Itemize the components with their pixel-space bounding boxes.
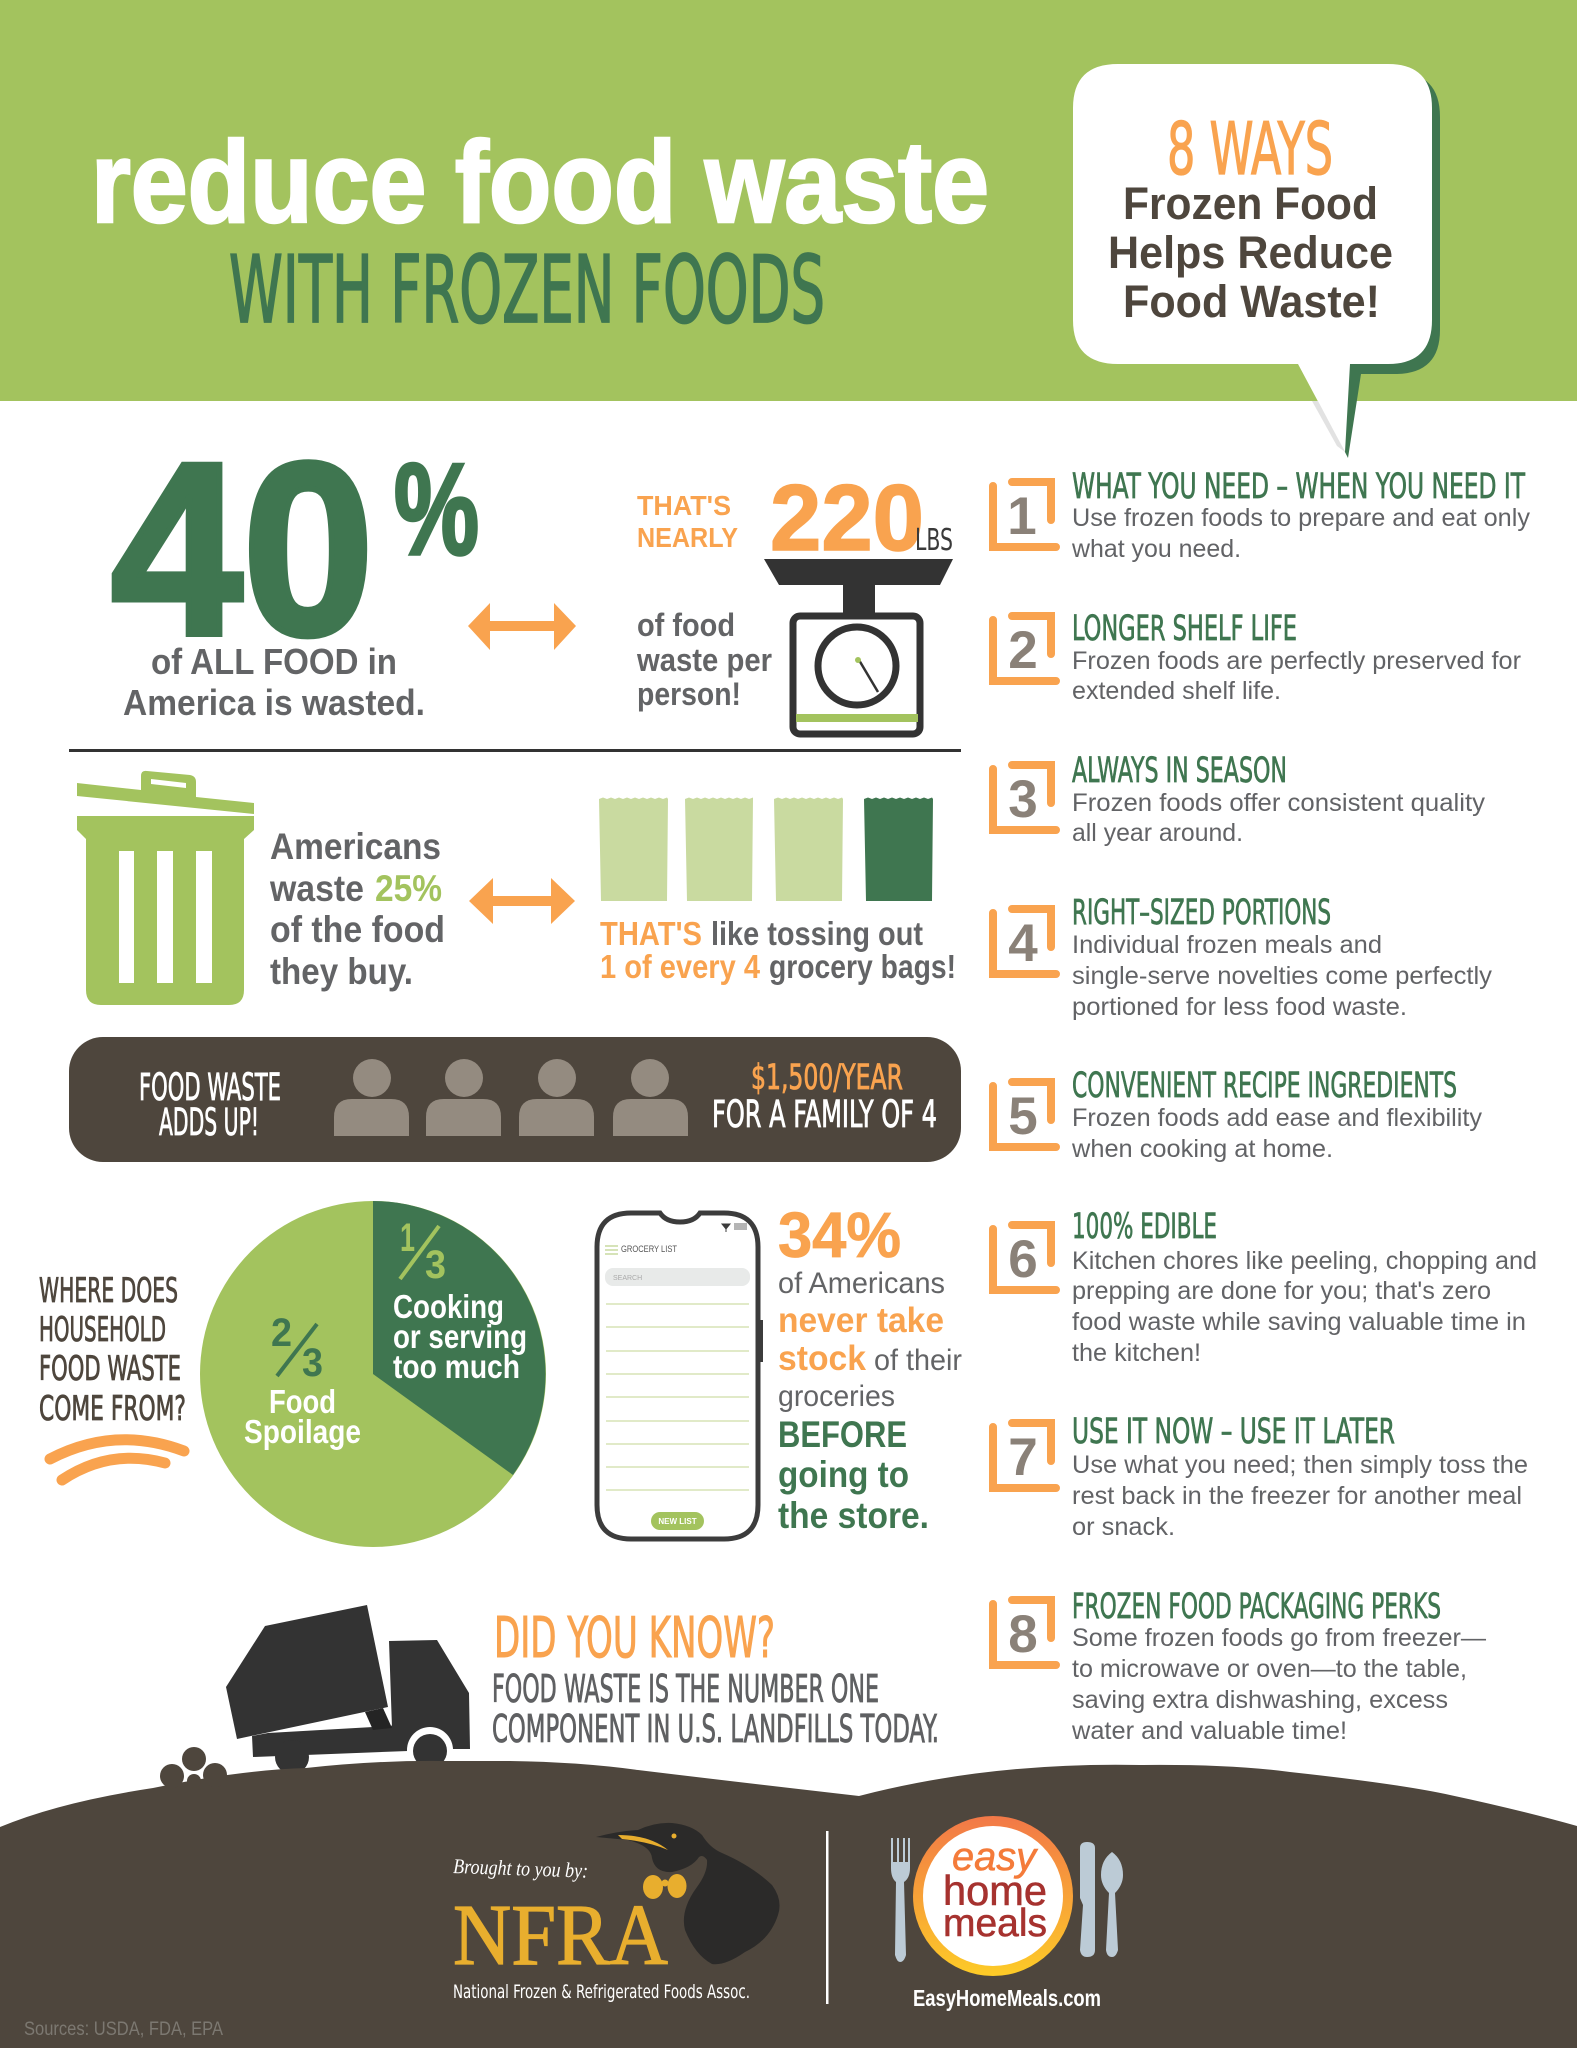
speech bubble: Helps Reduce	[1108, 227, 1393, 278]
list item 6: the kitchen!	[1072, 1339, 1201, 1367]
icon: phone grocery list: GROCERY LIST	[621, 1244, 677, 1254]
text: one of every four bags: like tossing out	[711, 915, 923, 952]
list item 3	[993, 751, 1486, 847]
logo: NFRA	[453, 1823, 780, 2003]
logo: Easy Home Meals	[891, 1816, 1123, 2011]
list item 2: LONGER SHELF LIFE	[1072, 609, 1297, 649]
sources: Sources: USDA, FDA, EPA	[24, 2019, 223, 2040]
list item 1: Use frozen foods to prepare and eat only	[1072, 504, 1530, 532]
list item 4: Individual frozen meals and	[1072, 931, 1382, 959]
arrow: equals 220 lbs	[468, 603, 576, 650]
list item 3: ALWAYS IN SEASON	[1072, 751, 1287, 791]
logo: Easy Home Meals: home	[943, 1867, 1047, 1914]
text: 34 percent of Americans: BEFORE	[778, 1414, 907, 1455]
40 percent statistic	[111, 412, 479, 723]
list item 7	[993, 1412, 1528, 1541]
list item 6: 6	[1008, 1230, 1038, 1289]
40 percent statistic: of ALL FOOD in	[151, 641, 397, 682]
list item 6: 100% EDIBLE	[1072, 1207, 1217, 1247]
list item 5: 5	[1008, 1087, 1038, 1146]
list item 7: or snack.	[1072, 1513, 1175, 1541]
title: reduce food waste	[91, 117, 989, 247]
list item 2	[993, 609, 1521, 705]
list item 8	[993, 1587, 1486, 1745]
text: 34 percent of Americans: never take	[778, 1301, 944, 1340]
pie chart: 2	[271, 1311, 292, 1355]
text: where does household food waste come from	[39, 1271, 186, 1480]
food waste balls	[160, 1747, 227, 1788]
arrow: like tossing out bags	[469, 878, 575, 924]
list item 7: Use what you need; then simply toss the	[1072, 1451, 1528, 1479]
220 lbs statistic: of food	[637, 607, 735, 643]
list item 2: 2	[1008, 621, 1038, 680]
220 lbs statistic: 220	[770, 465, 924, 570]
pie chart: 3	[425, 1243, 446, 1287]
list item 5	[993, 1066, 1482, 1163]
pie chart: Food	[269, 1383, 336, 1420]
panel: food waste adds up	[69, 1037, 961, 1162]
text: one of every four bags: THAT'S	[600, 915, 702, 952]
list item 1: what you need.	[1071, 535, 1241, 563]
panel: food waste adds up: ADDS UP!	[159, 1101, 259, 1144]
logo: Easy Home Meals: EasyHomeMeals.com	[913, 1985, 1101, 2011]
icon: phone grocery list	[597, 1213, 763, 1539]
220 lbs statistic: THAT'S	[637, 490, 731, 521]
list item 4: RIGHT–SIZED PORTIONS	[1072, 893, 1331, 933]
text: Americans waste 25%: they buy.	[270, 951, 413, 992]
logo: Easy Home Meals: easy	[952, 1835, 1039, 1879]
text: 34 percent of Americans: of their	[874, 1344, 962, 1377]
220 lbs statistic: waste per	[636, 642, 772, 678]
list item 1: 1	[1007, 487, 1037, 546]
logo divider	[826, 1831, 828, 2004]
pie chart: 1	[400, 1216, 415, 1260]
header band	[0, 0, 1577, 401]
list item 3: Frozen foods offer consistent quality	[1072, 789, 1486, 817]
pie chart: Cooking	[393, 1288, 504, 1325]
list item 8: to microwave or oven—to the table,	[1072, 1655, 1467, 1683]
text: Americans waste 25%: 25%	[375, 868, 442, 909]
list item 8: saving extra dishwashing, excess	[1072, 1686, 1448, 1714]
text: 34 percent of Americans: groceries	[778, 1380, 895, 1413]
text: 34 percent of Americans	[778, 1199, 962, 1536]
pie chart	[200, 1201, 546, 1547]
text: where does household food waste come from: HOUSEHOLD	[39, 1310, 166, 1350]
text: where does household food waste come from: FOOD WASTE	[39, 1349, 181, 1389]
list item 7: rest back in the freezer for another meal	[1072, 1482, 1522, 1510]
text: did you know: FOOD WASTE IS THE NUMBER ONE	[492, 1667, 879, 1711]
text: 34 percent of Americans: 34%	[778, 1199, 901, 1271]
panel: food waste adds up: FOR A FAMILY OF 4	[712, 1093, 937, 1136]
text: one of every four bags	[600, 915, 956, 985]
220 lbs statistic: LBS	[915, 523, 953, 558]
list item 6: prepping are done for you; that's zero	[1072, 1277, 1491, 1305]
pie chart: too much	[393, 1348, 520, 1385]
icon: phone grocery list: NEW LIST	[658, 1517, 697, 1526]
list item 5: Frozen foods add ease and flexibility	[1072, 1104, 1482, 1132]
panel: food waste adds up: $1,500/YEAR	[751, 1058, 903, 1098]
logo: NFRA: Brought to you by:	[453, 1854, 589, 1883]
list item 2: extended shelf life.	[1072, 677, 1281, 705]
icon: trash can	[77, 771, 254, 1005]
text: one of every four bags: 1 of every 4	[600, 948, 761, 985]
list item 4	[993, 893, 1493, 1021]
text: Americans waste 25%: waste	[269, 868, 364, 909]
list item 2: Frozen foods are perfectly preserved for	[1072, 647, 1521, 675]
pie chart: Spoilage	[244, 1413, 361, 1450]
list item 8: 8	[1008, 1605, 1038, 1664]
speech bubble: Frozen Food	[1123, 178, 1378, 229]
speech bubble	[1073, 64, 1440, 458]
220 lbs statistic: NEARLY	[637, 522, 738, 553]
list item 8: Some frozen foods go from freezer—	[1072, 1624, 1486, 1652]
text: did you know	[492, 1606, 939, 1751]
logo: NFRA: NFRA	[453, 1886, 668, 1983]
logo: Easy Home Meals: meals	[943, 1902, 1047, 1945]
list item 6: Kitchen chores like peeling, chopping and	[1072, 1247, 1537, 1275]
text: did you know: COMPONENT IN U.S. LANDFILLS TODAY.	[492, 1707, 939, 1751]
list item 7: USE IT NOW – USE IT LATER	[1072, 1412, 1395, 1452]
icon: scale	[764, 559, 953, 734]
40 percent statistic: 40	[111, 412, 374, 687]
list item 8: water and valuable time!	[1071, 1717, 1347, 1745]
list item 3: all year around.	[1072, 819, 1243, 847]
footer hill	[0, 1761, 1577, 2048]
speech bubble: 8 WAYS	[1167, 107, 1333, 191]
title: WITH FROZEN FOODS	[229, 236, 825, 344]
list item 5: when cooking at home.	[1071, 1135, 1333, 1163]
40 percent statistic: %	[394, 436, 479, 582]
title	[91, 117, 989, 344]
pie chart: 3	[302, 1341, 323, 1385]
text: where does household food waste come from: WHERE DOES	[39, 1271, 178, 1311]
text: Americans waste 25%: Americans	[270, 826, 441, 867]
icon: dump truck	[226, 1605, 470, 1774]
logo: NFRA: National Frozen & Refrigerated Foods Assoc.	[453, 1981, 750, 2003]
list item 6: food waste while saving valuable time in	[1072, 1308, 1526, 1336]
220 lbs statistic: person!	[637, 676, 741, 712]
pie chart: or serving	[393, 1318, 527, 1355]
list item 1	[993, 467, 1530, 563]
text: 34 percent of Americans: of Americans	[778, 1267, 945, 1300]
list item 4: 4	[1008, 914, 1038, 973]
grocery bags	[599, 798, 933, 901]
text: Americans waste 25%	[269, 826, 445, 992]
220 lbs statistic	[636, 465, 953, 712]
list item 7: 7	[1008, 1428, 1038, 1487]
text: did you know: DID YOU KNOW?	[494, 1606, 775, 1671]
40 percent statistic: America is wasted.	[123, 682, 425, 723]
list item 4: single-serve novelties come perfectly	[1072, 962, 1493, 990]
text: 34 percent of Americans: the store.	[778, 1495, 929, 1536]
text: where does household food waste come from: COME FROM?	[39, 1389, 186, 1429]
text: Americans waste 25%: of the food	[270, 909, 445, 950]
text: 34 percent of Americans: going to	[778, 1454, 909, 1495]
icon: phone grocery list: SEARCH	[613, 1275, 642, 1282]
list item 6	[993, 1207, 1537, 1367]
panel: food waste adds up: FOOD WASTE	[139, 1066, 281, 1109]
speech bubble: Food Waste!	[1123, 276, 1380, 327]
text: 34 percent of Americans: stock	[778, 1339, 867, 1378]
text: one of every four bags: grocery bags!	[769, 948, 956, 985]
divider	[69, 749, 961, 752]
list item 4: portioned for less food waste.	[1072, 993, 1407, 1021]
list item 3: 3	[1008, 770, 1038, 829]
